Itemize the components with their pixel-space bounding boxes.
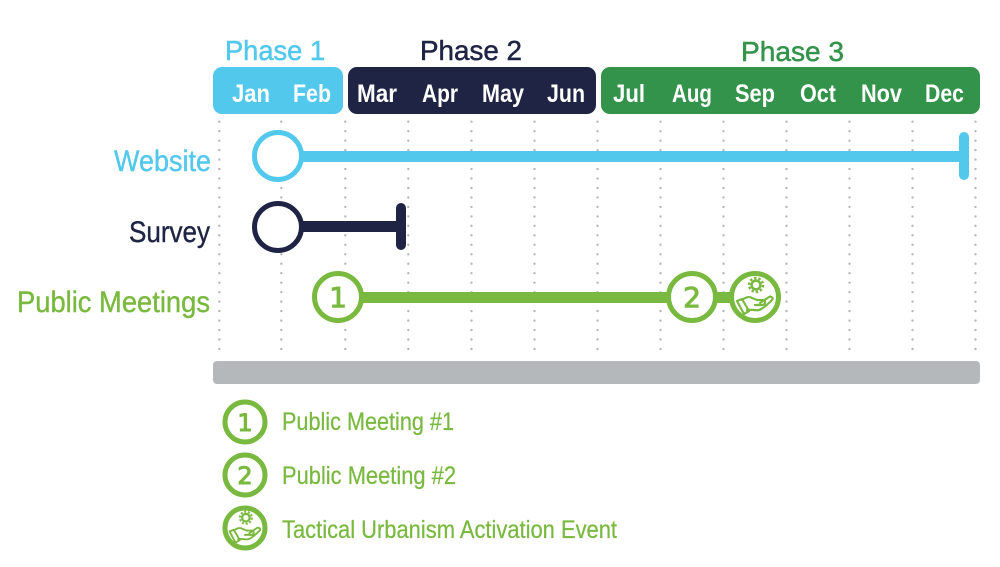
legend item: Public Meeting #1: 1 xyxy=(237,409,253,437)
heading: Phase 2: Phase 2 xyxy=(420,35,522,66)
panel: Phase 3 months xyxy=(601,67,980,114)
timeline bar: Public Meetings xyxy=(314,274,778,320)
panel: Phase 1 months: Jan xyxy=(232,80,270,108)
legend item: Tactical Urbanism Activation Event xyxy=(225,508,617,548)
panel: Phase 3 months: Aug xyxy=(672,80,712,108)
heading: Phase 1: Phase 1 xyxy=(225,35,325,66)
marker: tactical urbanism event xyxy=(732,274,778,320)
label: Survey: Survey xyxy=(129,216,210,249)
panel: Phase 3 months: Sep xyxy=(735,80,775,108)
label: Website: Website xyxy=(114,145,211,178)
marker: meeting 1 xyxy=(314,274,362,320)
legend item: Tactical Urbanism Activation Event: Tactical Urbanism Activation Event xyxy=(282,516,617,544)
timeline bar: Website xyxy=(254,132,969,180)
axis base bar xyxy=(213,361,980,384)
grid: month dotted guide lines xyxy=(219,122,976,358)
panel: Phase 2 months: May xyxy=(482,80,524,108)
panel: Phase 3 months: Dec xyxy=(925,80,964,108)
panel: Phase 3 months: Nov xyxy=(861,80,902,108)
legend item: Public Meeting #2 xyxy=(225,455,456,495)
legend xyxy=(225,402,617,548)
legend item: Public Meeting #1 xyxy=(225,402,454,442)
panel: Phase 2 months xyxy=(348,67,596,114)
legend item: Public Meeting #2: Public Meeting #2 xyxy=(282,462,456,490)
legend item: Public Meeting #2: 2 xyxy=(237,462,253,490)
marker: meeting 1: 1 xyxy=(329,281,347,314)
marker: meeting 2: 2 xyxy=(683,281,701,314)
panel: Phase 2 months: Apr xyxy=(422,80,458,108)
panel: Phase 1 months: Feb xyxy=(293,80,331,108)
panel: Phase 3 months: Oct xyxy=(800,80,837,108)
panel: Phase 2 months: Jun xyxy=(547,80,585,108)
timeline bar: Survey xyxy=(254,203,406,250)
marker: meeting 2 xyxy=(668,274,716,320)
panel: Phase 3 months: Jul xyxy=(613,80,645,108)
heading: Phase 3: Phase 3 xyxy=(741,36,844,67)
legend item: Public Meeting #1: Public Meeting #1 xyxy=(282,408,454,436)
panel: Phase 2 months: Mar xyxy=(357,80,397,108)
panel: Phase 1 months xyxy=(213,67,343,114)
label: Public Meetings: Public Meetings xyxy=(17,286,210,319)
